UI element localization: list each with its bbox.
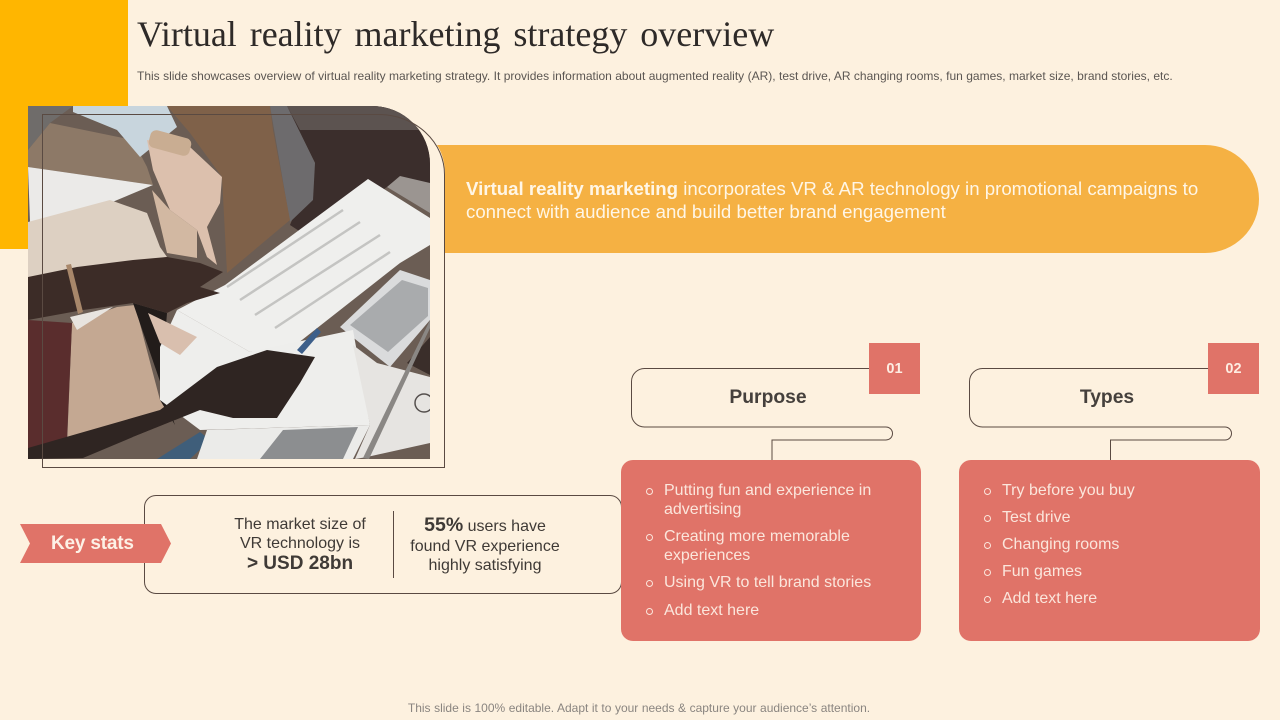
key stats panel [144, 495, 622, 594]
photo: hands reviewing documents [28, 106, 430, 459]
footer note: This slide is 100% editable. Adapt it to your needs & capture your audience’s attention. [408, 701, 870, 715]
bullet marker [984, 596, 991, 603]
types heading outline and connector [969, 368, 1232, 460]
stat: market size: > USD 28bn [247, 553, 353, 574]
bullet marker [984, 515, 991, 522]
description text: This slide showcases overview of virtual reality marketing strategy. It provides information about augmented reality (AR), test drive, AR changing rooms, fun games, market size, brand stories, etc. [137, 69, 1173, 83]
stat: user satisfaction: 55% users have [424, 514, 546, 536]
purpose item 1: Putting fun and experience in [664, 482, 871, 499]
banner text [466, 178, 1198, 222]
bullet marker [646, 534, 653, 541]
stat: user satisfaction: found VR experience [410, 538, 560, 555]
stat: market size: The market size of [234, 516, 366, 533]
number badge 01: 01 [886, 361, 903, 377]
stat: market size [234, 516, 366, 574]
stat: user satisfaction [410, 514, 560, 574]
number badge 02: 02 [1225, 361, 1242, 377]
yellow corner block [0, 0, 128, 249]
purpose item 1: advertising [664, 501, 741, 518]
types item 1: Try before you buy [1002, 482, 1135, 499]
types item 5: Add text here [1002, 590, 1097, 607]
purpose item 3: Using VR to tell brand stories [664, 574, 871, 591]
bullet marker [984, 488, 991, 495]
purpose heading outline and connector [631, 368, 893, 460]
types item 2: Test drive [1002, 509, 1070, 526]
bullet marker [646, 580, 653, 587]
bullet marker [646, 608, 653, 615]
title: Virtual reality marketing strategy overview [137, 14, 774, 54]
ribbon label: Key stats [51, 533, 134, 554]
purpose heading: Purpose [729, 387, 807, 408]
bullet marker [984, 542, 991, 549]
photo outline frame [42, 114, 445, 468]
bullet marker [646, 488, 653, 495]
panel: purpose list [621, 460, 921, 641]
types item 4: Fun games [1002, 563, 1082, 580]
types heading: Types [1080, 387, 1134, 408]
orange definition banner [437, 145, 1259, 253]
purpose item 1 [664, 482, 871, 518]
types item 3: Changing rooms [1002, 536, 1119, 553]
purpose item 2 [664, 528, 850, 564]
panel: types list [959, 460, 1260, 641]
purpose item 2: experiences [664, 547, 750, 564]
stat: user satisfaction: highly satisfying [429, 557, 541, 574]
key stats ribbon [20, 524, 171, 563]
purpose item 4: Add text here [664, 602, 759, 619]
banner text: connect with audience and build better brand engagement [466, 201, 946, 222]
number badge 01 [869, 343, 920, 394]
bullet marker [984, 569, 991, 576]
stat divider [393, 511, 394, 578]
number badge 02 [1208, 343, 1259, 394]
banner text: Virtual reality marketing incorporates VR & AR technology in promotional campaigns to [466, 178, 1198, 199]
stat: market size: VR technology is [240, 535, 360, 552]
purpose item 2: Creating more memorable [664, 528, 850, 545]
